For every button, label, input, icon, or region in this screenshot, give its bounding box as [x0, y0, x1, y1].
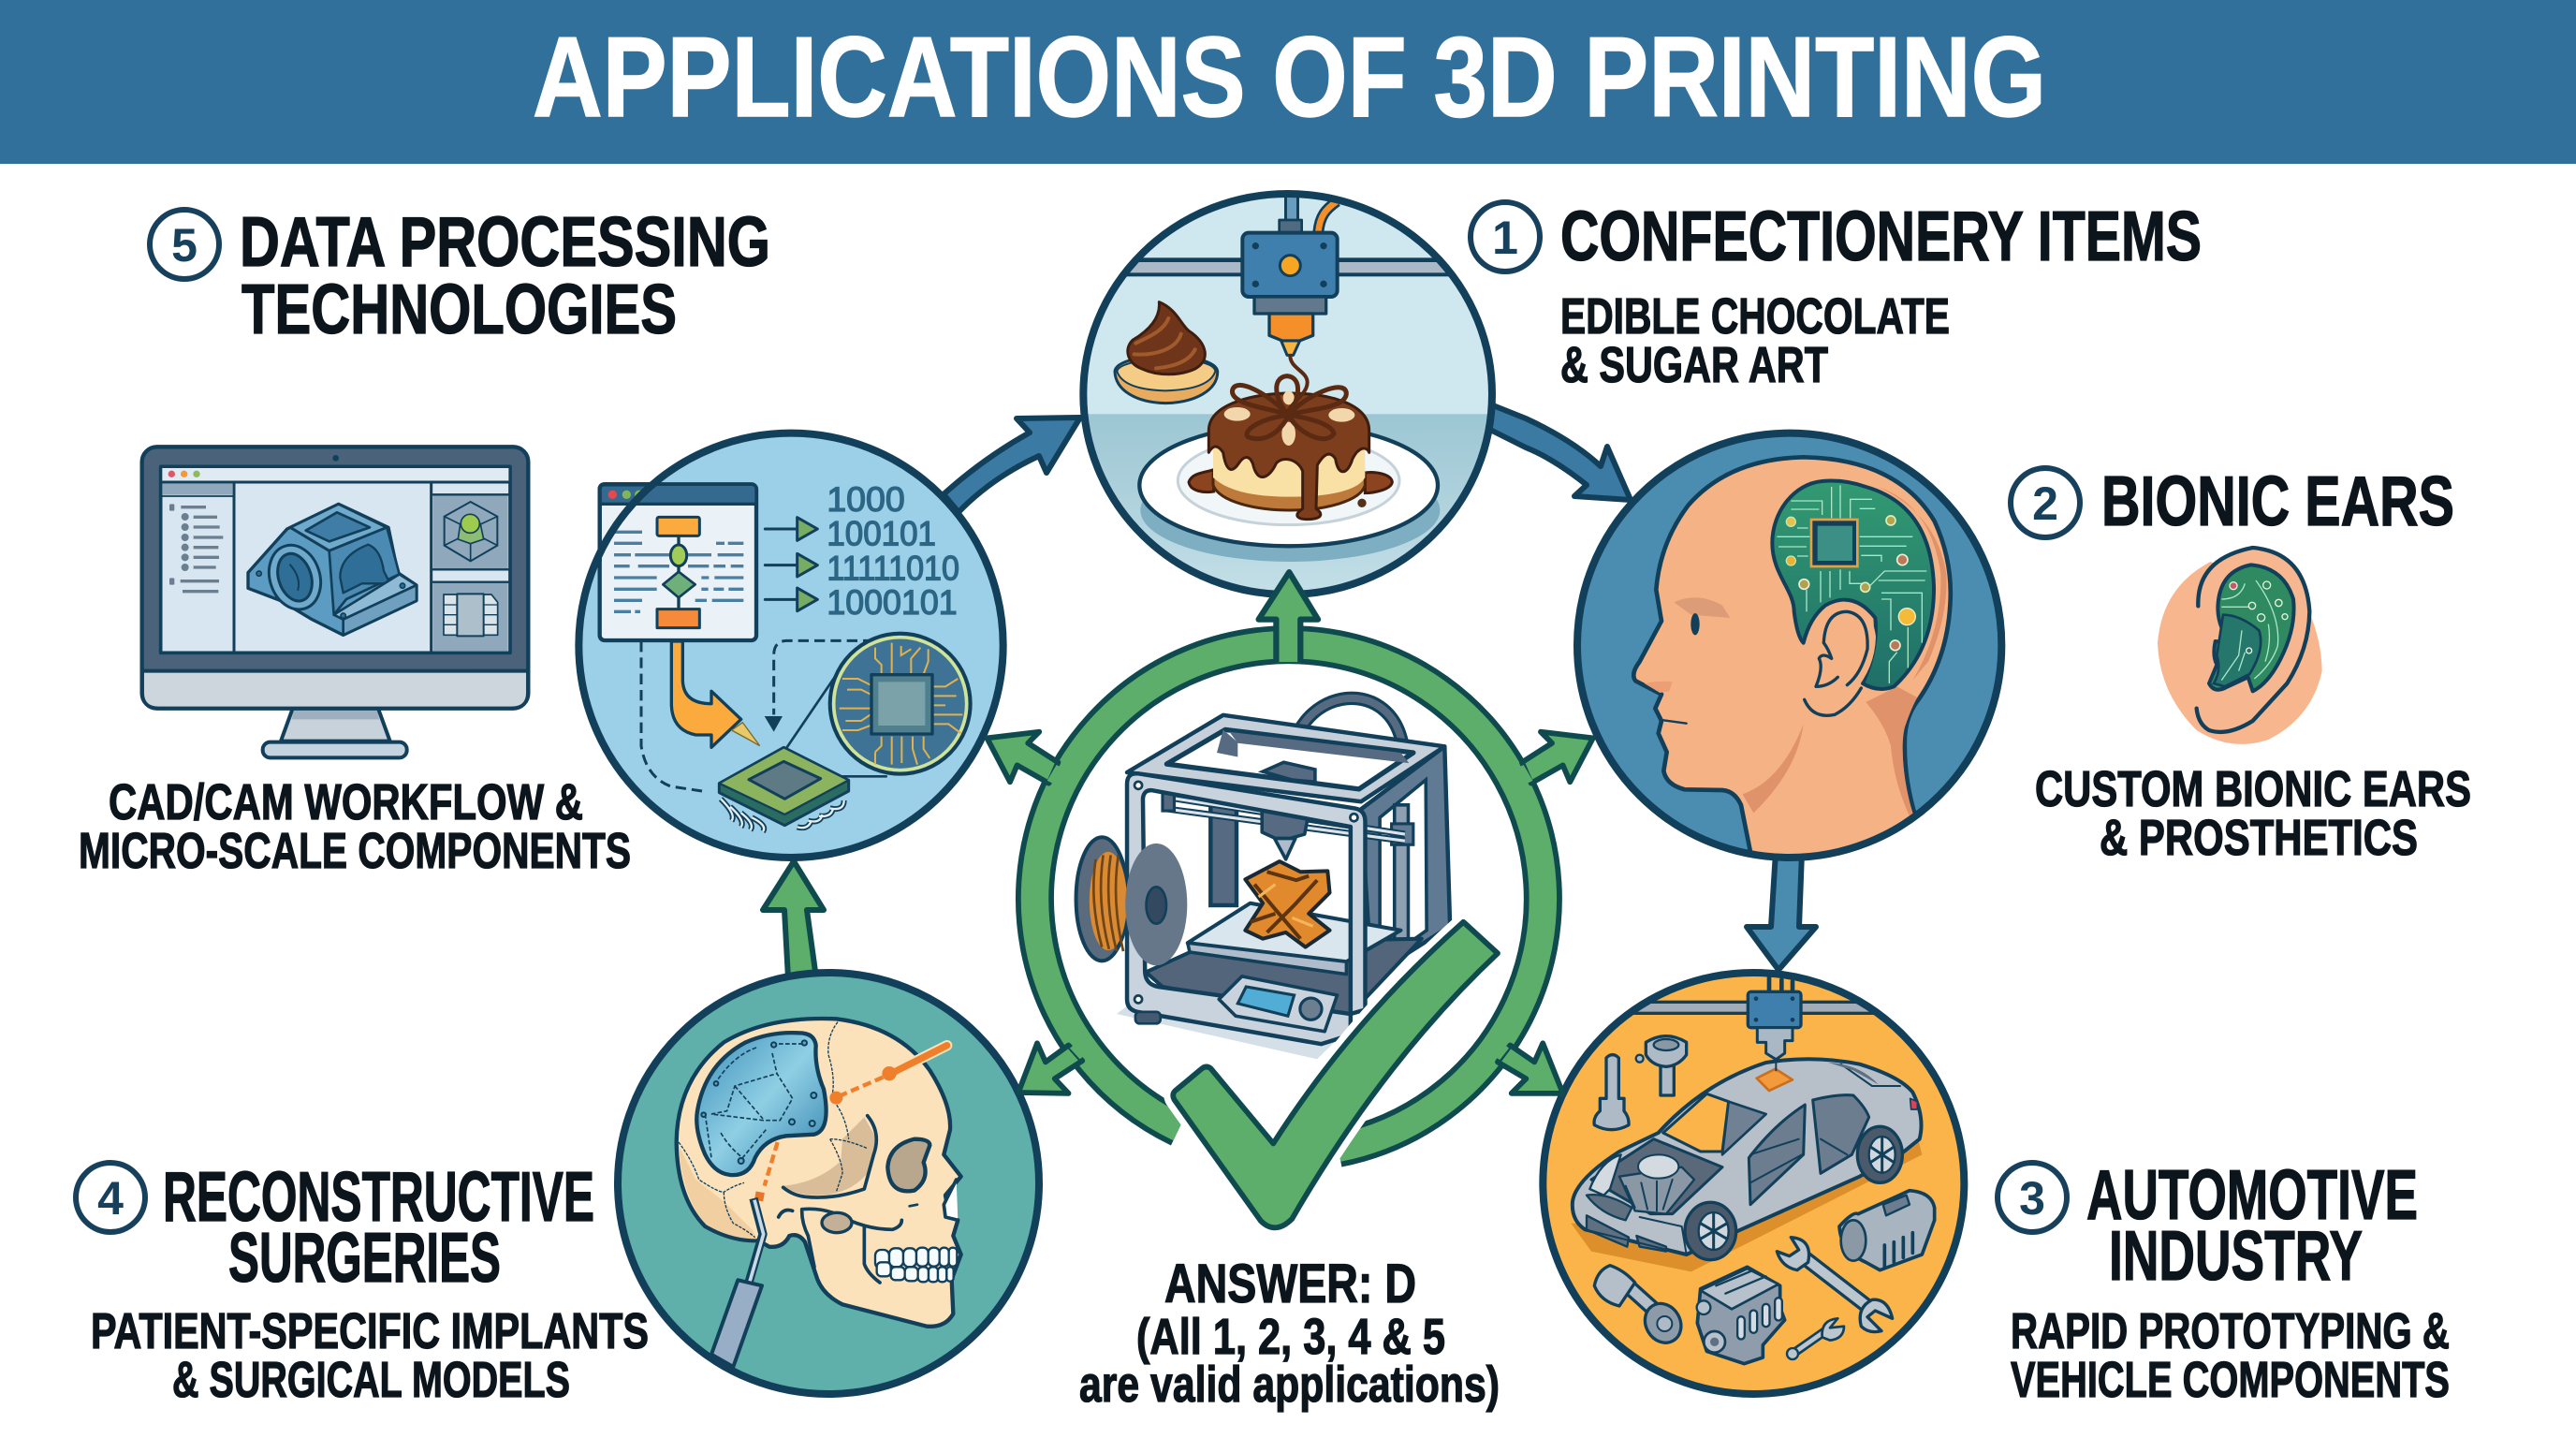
text: confectionery description: & SUGAR ART	[1560, 337, 1828, 393]
circle outline	[1083, 194, 1492, 594]
plate	[1139, 424, 1438, 546]
printed patch on roof	[1757, 1069, 1793, 1091]
binary code: 1000101	[827, 582, 958, 622]
loose parts: piston	[1594, 1266, 1688, 1349]
loose parts: starter motor	[1839, 1191, 1935, 1270]
heading 3: automotive industry: 3	[2019, 1172, 2045, 1225]
text: CAD/CAM description: MICRO-SCALE COMPONENTS	[79, 823, 631, 879]
panel: reconstructive surgery circle	[618, 973, 1039, 1394]
software window with flowchart	[600, 484, 756, 640]
text: surgery description: & SURGICAL MODELS	[172, 1352, 570, 1408]
text: confectionery description	[1560, 288, 1950, 393]
panel: automotive circle	[1516, 973, 1991, 1394]
plate shadow	[1140, 499, 1440, 562]
icon: CAD monitor	[142, 447, 528, 757]
heading 4: reconstructive surgeries: RECONSTRUCTIVE	[163, 1157, 594, 1236]
printed orange object	[1245, 861, 1330, 947]
nose shade and mouth	[1645, 682, 1687, 724]
panel: confectionery circle	[1079, 190, 1496, 597]
car body	[1573, 1059, 1922, 1255]
piped dessert	[1115, 302, 1218, 404]
blue arrow: data to confectionery	[944, 418, 1080, 512]
table surface	[1088, 414, 1487, 590]
neck and jaw shading	[1743, 686, 1917, 816]
monitor body	[142, 447, 528, 709]
heading 3: automotive industry: INDUSTRY	[2109, 1216, 2363, 1295]
car ground shadow	[1571, 1142, 1922, 1271]
heading 1: confectionery items: 1	[1492, 212, 1518, 264]
text: surgery description: PATIENT-SPECIFIC IMPLANTS	[91, 1303, 649, 1359]
filament spool	[1076, 837, 1187, 965]
panel: data processing circle	[578, 433, 1003, 858]
cranial sutures	[679, 1022, 868, 1238]
print head	[1242, 220, 1338, 355]
circle outline	[578, 433, 1003, 858]
answer text: (All 1, 2, 3, 4 & 5	[1136, 1309, 1445, 1365]
text: CAD/CAM description: CAD/CAM WORKFLOW &	[109, 774, 583, 830]
jaw and cheek lines	[779, 1205, 917, 1283]
heading 5: data processing technologies	[150, 202, 770, 348]
text: CAD/CAM description	[79, 774, 631, 879]
panel: bionic ears head circle	[1577, 433, 2001, 868]
green arrow: lower left	[1018, 1036, 1095, 1093]
answer text: ANSWER: D	[1164, 1254, 1416, 1314]
text: confectionery description: EDIBLE CHOCOLATE	[1560, 288, 1950, 345]
monitor stand	[263, 707, 407, 757]
heading 3: automotive industry	[1998, 1155, 2418, 1295]
heading 2: bionic ears: 2	[2032, 477, 2058, 530]
binary code: 1000	[827, 479, 905, 519]
magnifier lines	[782, 677, 886, 776]
3D printer	[1117, 698, 1450, 1059]
circuit implant	[1772, 480, 1934, 689]
heading 5: data processing technologies: TECHNOLOGIES	[242, 270, 677, 348]
binary code: 11111010	[827, 548, 959, 587]
loose parts: engine	[1697, 1267, 1785, 1364]
microchip	[719, 747, 849, 831]
skull	[677, 1019, 961, 1327]
heading 4: reconstructive surgeries: 4	[97, 1172, 124, 1225]
binary code	[827, 479, 959, 622]
heading 2: bionic ears: BIONIC EARS	[2101, 462, 2454, 540]
answer text	[1079, 1254, 1500, 1413]
cables	[1292, 190, 1337, 232]
blue arrow: bionic ears to automotive	[1747, 852, 1816, 970]
heading 4: reconstructive surgeries: SURGERIES	[228, 1218, 501, 1297]
green check mark	[1173, 922, 1498, 1227]
blue arrow: confectionery to bionic ears	[1488, 404, 1631, 500]
teeth	[875, 1248, 957, 1282]
heading 1: confectionery items	[1471, 197, 2202, 275]
orange transfer arrow	[671, 641, 760, 747]
head profile	[1633, 457, 1951, 868]
circle outline	[1577, 433, 2001, 858]
answer text: are valid applications)	[1079, 1357, 1500, 1413]
gantry rail	[1127, 257, 1449, 277]
dashed connectors	[641, 640, 873, 791]
green arrow: lower right	[1485, 1036, 1563, 1093]
CAD screen	[161, 466, 510, 653]
print head	[1748, 974, 1801, 1060]
eye socket	[887, 1139, 929, 1191]
binary code: 100101	[827, 514, 936, 553]
loose parts: small wrench	[1787, 1318, 1844, 1359]
heading 4: reconstructive surgeries	[76, 1157, 594, 1297]
titanium implant	[696, 1033, 827, 1175]
title banner: APPLICATIONS OF 3D PRINTING	[533, 13, 2046, 140]
surgical tool	[711, 1198, 764, 1367]
green ring	[1034, 645, 1543, 1148]
text: bionic ears description	[2035, 761, 2471, 866]
green arrow: up	[1259, 572, 1318, 662]
title banner	[0, 0, 2576, 164]
ear	[1805, 602, 1876, 716]
gantry rail	[1633, 1000, 1874, 1015]
cake with chocolate filigree	[1189, 391, 1392, 520]
output arrows	[765, 518, 817, 611]
green arrow: surgery to data processing	[763, 861, 824, 978]
text: surgery description	[91, 1303, 649, 1408]
heading 1: confectionery items: CONFECTIONERY ITEMS	[1560, 197, 2202, 275]
orange guide line	[754, 1046, 947, 1201]
heading 5: data processing technologies: 5	[171, 219, 198, 271]
magnified chip	[830, 634, 971, 774]
chocolate filament and ribbon flower	[1233, 356, 1346, 439]
green arrow: upper right	[1508, 732, 1593, 789]
nasal opening	[944, 1180, 958, 1220]
heading 5: data processing technologies: DATA PROCESSING	[240, 202, 770, 281]
window over outline	[600, 484, 657, 562]
heading 3: automotive industry: AUTOMOTIVE	[2086, 1155, 2418, 1234]
text: bionic ears description: & PROSTHETICS	[2100, 810, 2418, 866]
car wheels	[1685, 1126, 1902, 1260]
loose parts: pin	[1594, 1055, 1629, 1130]
brow and eye	[1674, 597, 1730, 635]
circle outline	[618, 973, 1039, 1394]
loose parts: flange	[1636, 1036, 1687, 1095]
green arrow: upper left	[987, 732, 1073, 789]
central hub: ring, printer, check	[987, 572, 1593, 1227]
CAD 3D part	[248, 504, 417, 635]
text: automotive description	[2011, 1303, 2450, 1408]
heading 2: bionic ears	[2011, 462, 2454, 540]
loose parts: wrench	[1777, 1238, 1893, 1332]
icon: bionic ear	[2158, 548, 2322, 744]
circle outline	[1543, 973, 1964, 1394]
